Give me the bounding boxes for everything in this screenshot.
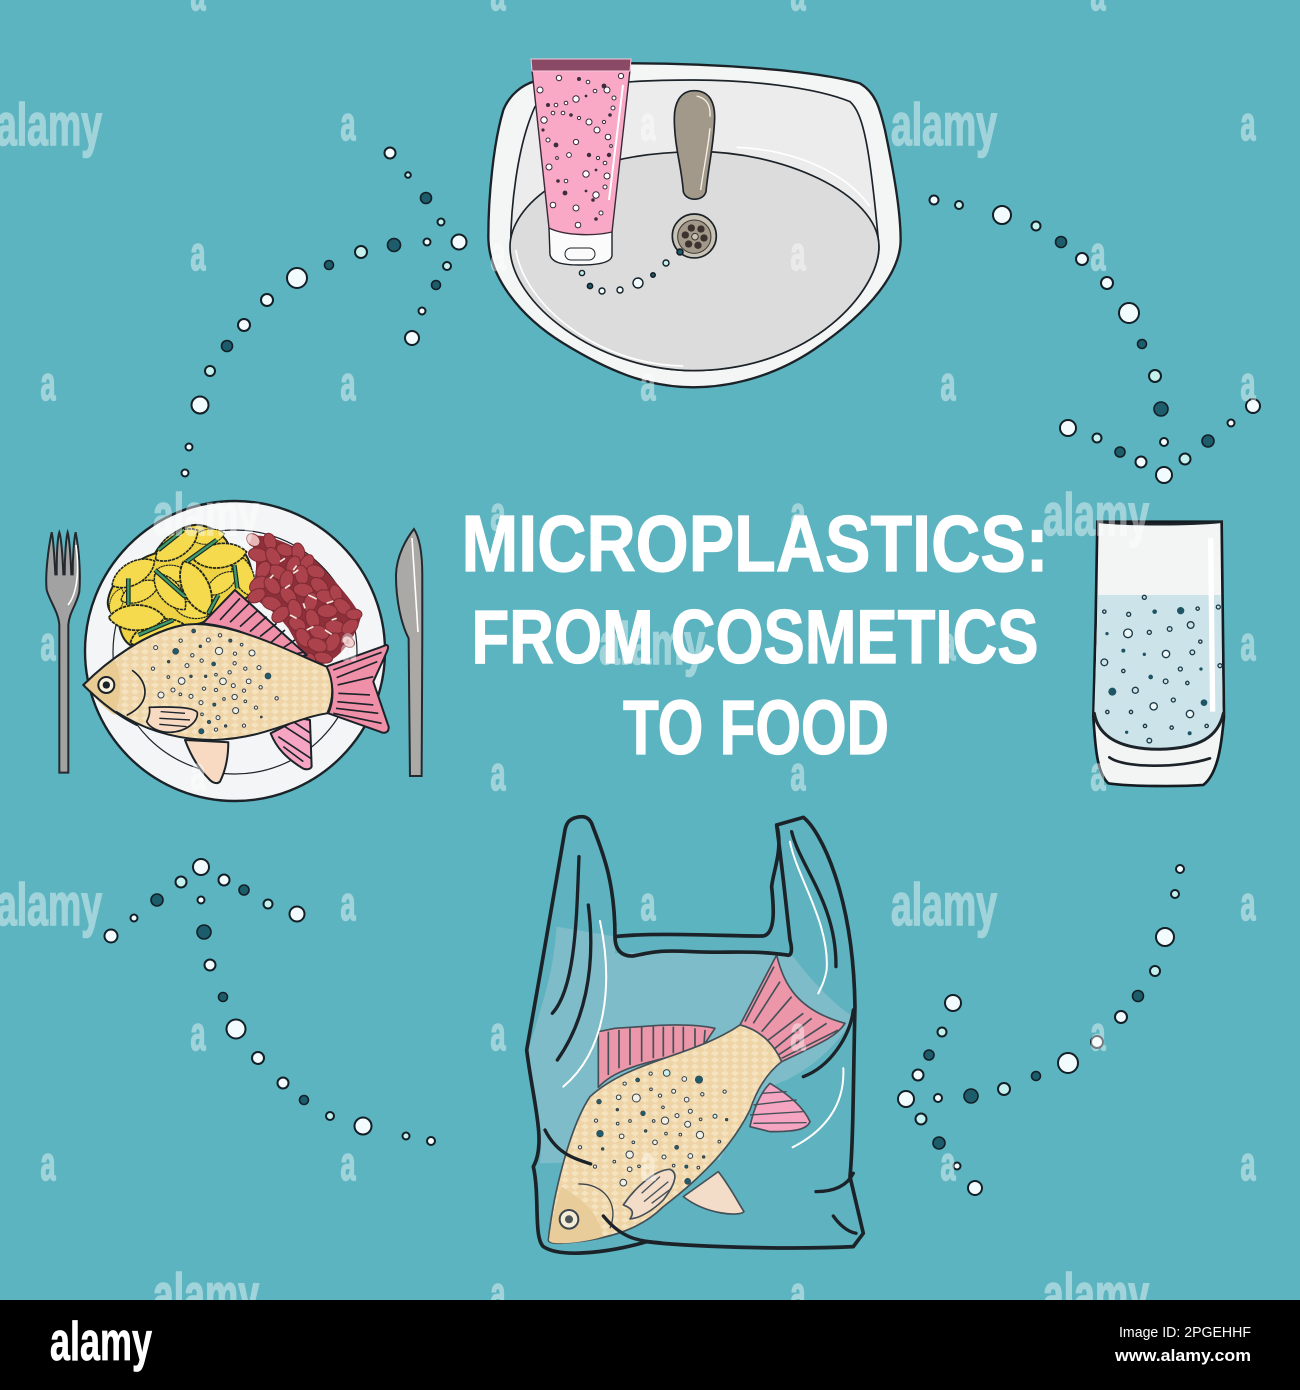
watermark tile: a — [640, 1138, 656, 1191]
watermark tile: a — [190, 1008, 206, 1061]
bag fold lines — [545, 832, 856, 1243]
sink bowl group in crop coordinates — [488, 63, 901, 387]
microplastics in fish — [151, 629, 278, 734]
watermark tile: a — [190, 748, 206, 801]
rear fin — [750, 1083, 810, 1132]
bean highlights — [270, 558, 337, 634]
fork — [46, 532, 80, 773]
lower rear fin stripes — [278, 722, 311, 762]
watermark tile: a — [940, 358, 956, 411]
watermark tile: a — [790, 488, 806, 541]
potatoes — [106, 521, 260, 655]
watermark tile: a — [490, 228, 506, 281]
water glass — [1093, 522, 1224, 786]
watermark tile: alamy — [153, 1262, 259, 1328]
watermark tile: a — [790, 1268, 806, 1321]
plate — [85, 501, 385, 801]
tap — [674, 91, 715, 199]
drain — [672, 214, 716, 258]
sink basin outer rim — [488, 63, 901, 387]
beans — [244, 531, 362, 669]
watermark tile: a — [640, 878, 656, 931]
tail fin — [326, 645, 389, 733]
site url: www.alamy.com — [1114, 1346, 1251, 1365]
microbead trail to drain — [579, 249, 683, 294]
pectoral fin — [147, 707, 197, 732]
bean backing — [248, 536, 361, 664]
pectoral fin — [623, 1169, 675, 1219]
microplastic bubbles: top left arc — [182, 148, 466, 476]
gill — [578, 1184, 613, 1228]
watermark tile: a — [790, 228, 806, 281]
title — [462, 499, 1048, 771]
rear fin stripes — [750, 1092, 807, 1123]
plastic bag with fish — [527, 817, 863, 1253]
watermark tile: a — [790, 748, 806, 801]
watermark tile: a — [940, 1138, 956, 1191]
eye — [98, 677, 114, 693]
watermark tile: a — [490, 1268, 506, 1321]
food and fish — [83, 521, 389, 783]
lower rear fin — [271, 718, 312, 769]
watermark tile: a — [1090, 228, 1106, 281]
watermark tile: a — [1090, 748, 1106, 801]
bag lighter centre — [528, 927, 853, 1163]
gill — [127, 671, 145, 715]
fish head — [83, 660, 120, 715]
tail stripes — [333, 652, 382, 723]
cosmetic tube body — [532, 70, 630, 235]
watermark tile: alamy — [0, 872, 102, 938]
fork highlight — [68, 545, 78, 605]
watermark tile: a — [1240, 1138, 1256, 1191]
fish body — [548, 1025, 782, 1243]
dorsal fin — [203, 590, 307, 661]
eye — [560, 1210, 578, 1229]
watermark tile: a — [640, 98, 656, 151]
watermark tile: a — [40, 1138, 56, 1191]
watermark tile: a — [490, 1008, 506, 1061]
watermark tile: a — [1240, 358, 1256, 411]
pupil — [103, 681, 110, 689]
tap highlight — [697, 96, 710, 190]
watermark tile: a — [490, 488, 506, 541]
tail stripes — [745, 967, 838, 1058]
glass highlight — [1211, 538, 1213, 712]
pupil — [565, 1215, 573, 1223]
watermark tile: a — [40, 618, 56, 671]
footer bar — [0, 1300, 1300, 1390]
dorsal fin — [598, 1025, 715, 1087]
rim — [1097, 522, 1222, 524]
glass base line — [1109, 757, 1210, 766]
dorsal fin stripes — [220, 598, 303, 655]
image id: Image ID: 2PGEHHF — [1119, 1324, 1251, 1341]
bowl highlights — [516, 147, 870, 366]
fish outline over head — [83, 625, 183, 725]
watermark tile: a — [940, 618, 956, 671]
watermark tile: a — [490, 748, 506, 801]
watermark tile: a — [340, 98, 356, 151]
rosemary green — [128, 530, 237, 635]
fish body — [83, 624, 332, 740]
sink illustration — [488, 59, 901, 387]
potato backing — [108, 525, 253, 645]
bag white highlights — [563, 842, 843, 1147]
title: TO FOOD — [623, 685, 889, 771]
watermark tile: a — [340, 358, 356, 411]
watermark tile: alamy — [1043, 482, 1149, 548]
cosmetic tube cap — [549, 228, 612, 265]
watermark tile: a — [340, 1138, 356, 1191]
watermark tile: alamy — [891, 872, 997, 938]
watermark tile: a — [1240, 98, 1256, 151]
watermark tile: a — [790, 1008, 806, 1061]
plate with fish — [46, 501, 422, 801]
pectoral stripes — [642, 1177, 672, 1203]
sink back wall — [511, 80, 879, 371]
watermark tile: alamy — [891, 92, 997, 158]
microplastics in fish — [578, 1070, 728, 1186]
pectoral fin stripes — [159, 712, 190, 727]
glass body — [1093, 522, 1224, 786]
peach fin — [185, 740, 228, 783]
watermark tile: a — [340, 878, 356, 931]
title: MICROPLASTICS: — [462, 499, 1048, 588]
watermark tile: alamy — [0, 92, 102, 158]
watermark tile: a — [190, 228, 206, 281]
watermark tile: alamy — [599, 611, 705, 677]
tube microbeads — [537, 73, 624, 228]
tube highlight — [609, 85, 623, 200]
watermark tile: a — [1240, 878, 1256, 931]
rosemary dark — [128, 530, 237, 635]
bag fill — [527, 817, 863, 1253]
watermark tile: a — [1090, 1008, 1106, 1061]
footer logo: alamy — [50, 1310, 152, 1372]
cap detail — [565, 248, 595, 260]
watermark tile: alamy — [1043, 1262, 1149, 1328]
microplastic bubbles: bottom left arc — [104, 859, 435, 1145]
watermark tile: a — [640, 358, 656, 411]
bag outline — [527, 817, 863, 1253]
microplastics in water — [1101, 595, 1222, 743]
fish head — [549, 1187, 603, 1243]
title: FROM COSMETICS — [472, 595, 1038, 680]
plate inner ring — [113, 530, 357, 774]
water — [1094, 595, 1223, 749]
watermark tile: a — [340, 618, 356, 671]
fish tail — [740, 955, 845, 1062]
tube crimp — [531, 59, 631, 71]
watermark tile: a — [1240, 618, 1256, 671]
knife — [396, 529, 422, 776]
sink bowl — [510, 152, 879, 371]
microplastic bubbles: top right arc — [930, 196, 1260, 483]
peach fin — [683, 1172, 744, 1214]
watermark tile: alamy — [153, 482, 259, 548]
watermark tile: a — [40, 358, 56, 411]
dark particles — [1105, 607, 1207, 735]
knife highlight — [412, 538, 418, 632]
bowl line of glass — [1094, 713, 1223, 749]
dorsal stripes — [608, 1027, 705, 1075]
microplastic bubbles: bottom right arc — [898, 865, 1184, 1195]
